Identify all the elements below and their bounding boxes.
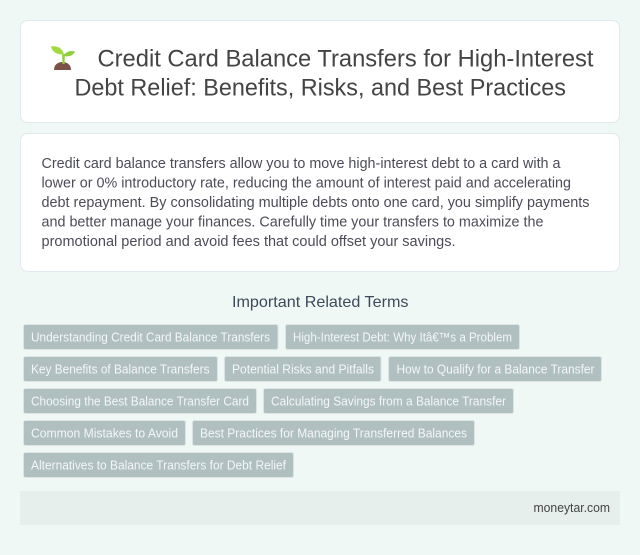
tag (24, 420, 186, 446)
text block: summary: Credit card balance transfers allow you to move high-interest debt to a card with a (42, 156, 561, 172)
tag (264, 388, 514, 414)
tag (24, 324, 278, 350)
tag (24, 356, 218, 382)
tag: Best Practices for Managing Transferred Balances (200, 426, 467, 440)
text block: summary: lower or 0% introductory rate, reducing the amount of interest paid and accelerating (42, 176, 571, 192)
text block: summary: promotional period and avoid fees that could offset your savings. (42, 234, 456, 250)
tag: How to Qualify for a Balance Transfer (396, 362, 594, 376)
tag: Alternatives to Balance Transfers for Debt Relief (31, 458, 286, 472)
text block: summary (42, 156, 590, 250)
panel: title card (20, 20, 620, 122)
footer: moneytar.com (534, 501, 610, 515)
tag: Common Mistakes to Avoid (31, 426, 178, 440)
tag: High-Interest Debt: Why Itâ€™s a Problem (293, 330, 512, 344)
title: Debt Relief: Benefits, Risks, and Best Practices (74, 74, 566, 102)
panel: summary card (20, 134, 620, 272)
text block: summary: and better manage your finances. Carefully time your transfers to maximize the (42, 214, 544, 230)
icon: sprout (51, 46, 75, 70)
tag (192, 420, 474, 446)
panel: related term tags (24, 324, 602, 478)
tag: Choosing the Best Balance Transfer Card (31, 394, 249, 408)
title: Credit Card Balance Transfers for High-Interest (98, 46, 594, 72)
tag: Key Benefits of Balance Transfers (31, 362, 210, 376)
title (74, 46, 594, 102)
tag: Understanding Credit Card Balance Transfers (31, 330, 270, 344)
tag: Potential Risks and Pitfalls (232, 362, 374, 376)
heading: important related terms: Important Related Terms (232, 294, 408, 311)
tag (388, 356, 602, 382)
tag (286, 324, 520, 350)
tag (224, 356, 381, 382)
tag (24, 452, 294, 478)
text block: summary: debt repayment. By consolidating multiple debts onto one card, you simplify payments (42, 195, 590, 211)
tag (24, 388, 256, 414)
tag: Calculating Savings from a Balance Transfer (271, 394, 506, 408)
footer (20, 491, 620, 525)
